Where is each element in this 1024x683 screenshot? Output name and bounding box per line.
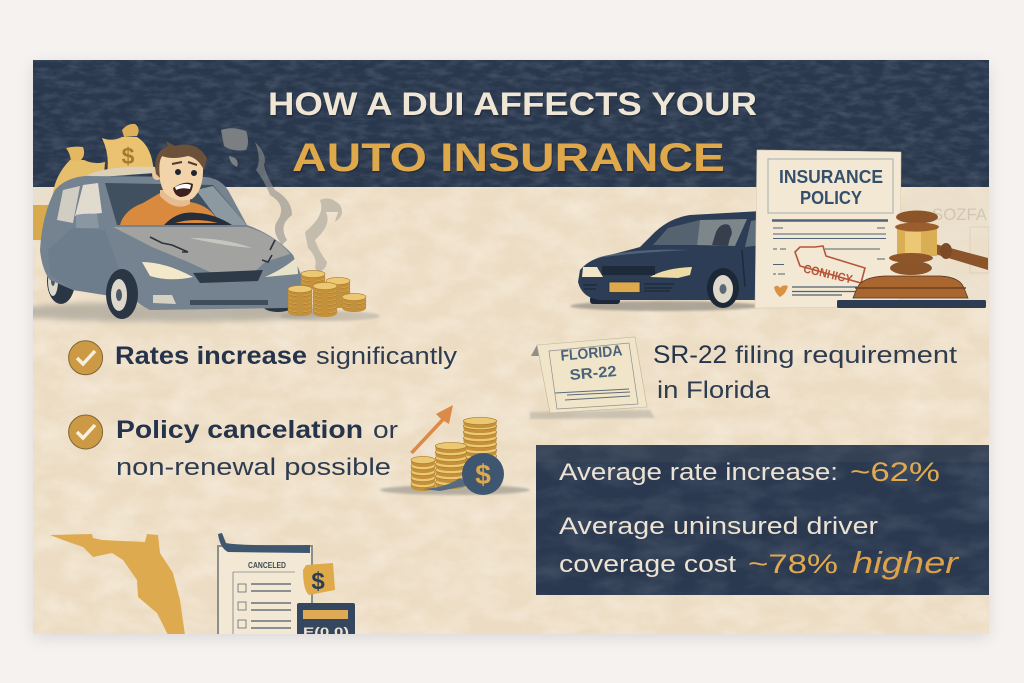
bullet: policy cancelation: Policy cancelation (116, 416, 363, 444)
door line (742, 250, 745, 287)
money bag back: $ (73, 174, 83, 193)
form lines (555, 389, 630, 400)
form inner frame (549, 343, 638, 409)
wheel (707, 268, 739, 308)
gavel handle (935, 244, 988, 270)
stat: uninsured coverage cost (559, 513, 960, 580)
clipboard sheet (218, 546, 312, 638)
illustration: yellow box left edge (33, 205, 48, 240)
stat: average rate increase: ~62% (850, 457, 940, 487)
hood cracks (150, 237, 275, 262)
ground shadow (5, 302, 335, 322)
illustration: gray car with shocked driver (5, 141, 335, 322)
rear wheel (47, 276, 74, 304)
car body (578, 211, 762, 300)
right headlight (650, 267, 692, 278)
car body (40, 176, 302, 310)
checklist (233, 572, 295, 634)
bumper vents (583, 284, 674, 291)
illustration: money bags (52, 124, 155, 197)
header band (33, 60, 989, 187)
policy heading (779, 166, 883, 208)
title: HOW A DUI AFFECTS YOUR (268, 86, 757, 122)
form sheet (537, 337, 647, 413)
red stamp (795, 246, 865, 286)
bullet: policy cancelation (116, 416, 398, 481)
red stamp: CONHICY (802, 262, 854, 286)
stat: uninsured coverage cost: higher (852, 545, 960, 580)
money bag front: $ (122, 143, 135, 169)
calculator: E(0.0) (303, 625, 349, 639)
SR-22 text (653, 341, 957, 404)
policy text lines (772, 220, 888, 295)
coin stack back (301, 270, 325, 289)
side panel shading (72, 290, 85, 292)
fog light (153, 295, 176, 304)
stat: average rate increase: Average rate increase: (559, 459, 838, 486)
bullet: rates increase: significantly (316, 343, 457, 370)
front wheel (106, 269, 138, 319)
stat: uninsured coverage cost: coverage cost (559, 551, 736, 578)
paper sheet (755, 150, 901, 308)
form shadow (530, 410, 655, 419)
windshield (653, 220, 700, 245)
windshield highlight (196, 186, 247, 225)
card shadow (33, 64, 989, 638)
driver shirt (120, 193, 217, 225)
stat: uninsured coverage cost: Average uninsured driver (559, 513, 878, 540)
ground shadow (570, 301, 760, 311)
coin stack front left (288, 285, 312, 316)
dollar tag: $ (311, 568, 325, 595)
form heading (560, 342, 625, 385)
illustration: Florida SR-22 form (530, 337, 655, 419)
policy heading: POLICY (800, 187, 863, 208)
stat: average rate increase (559, 457, 940, 487)
driver silhouette (712, 224, 732, 246)
coin stack small (342, 293, 366, 312)
stat: uninsured coverage cost: ~78% (748, 549, 838, 579)
form curl (531, 345, 541, 356)
small heart mark (774, 285, 788, 297)
coin stack tall (463, 417, 497, 469)
coin stack medium (435, 442, 467, 489)
rear window (697, 219, 747, 246)
coin stack front right (313, 282, 337, 317)
clipboard top band (218, 533, 310, 553)
paper background (33, 187, 989, 634)
policy heading: INSURANCE (779, 166, 883, 187)
illustration: left coin stacks (280, 270, 380, 321)
gavel block (853, 276, 968, 298)
front right wheel (264, 308, 288, 312)
canceled label: CANCELED (248, 560, 286, 570)
title frame (768, 159, 893, 213)
illustration: coins with rising arrow (380, 405, 530, 495)
SR-22 text: in Florida (657, 377, 771, 404)
illustration: faded document behind gavel (933, 208, 989, 274)
title: AUTO INSURANCE (293, 138, 726, 182)
money bag (422, 453, 504, 495)
grille (193, 270, 263, 283)
illustration: faded document behind gavel: SOZFA (932, 205, 988, 224)
hood shine (597, 250, 690, 258)
hood highlight (190, 238, 252, 248)
coin stack short (411, 456, 435, 491)
illustration: navy car (570, 211, 762, 311)
illustration: smoke (221, 128, 342, 272)
illustration: insurance policy document (755, 150, 901, 308)
form heading: SR-22 (569, 363, 617, 384)
driver neck (160, 190, 190, 207)
bullet: rates increase: Rates increase (115, 342, 307, 370)
SR-22 text: SR-22 (653, 341, 727, 369)
grille (602, 266, 655, 275)
driver head (152, 141, 207, 200)
left headlight (582, 267, 603, 277)
check icon: rates (69, 341, 103, 375)
illustration: canceled clipboard (218, 533, 355, 639)
rising arrow (410, 405, 453, 454)
handle knob (940, 243, 952, 259)
side window (745, 219, 762, 247)
title: AUTO INSURANCE (292, 136, 725, 180)
steering wheel (164, 212, 232, 225)
left headlight (142, 262, 193, 279)
side windows (57, 186, 80, 223)
gavel head (889, 210, 939, 275)
stat panel (536, 445, 989, 595)
license plate (609, 282, 640, 292)
check icon: policy (69, 415, 103, 449)
SR-22 text: filing requirement (735, 342, 957, 369)
money bag: $ (475, 459, 491, 490)
title (270, 92, 757, 173)
illustration: faded document behind left car (33, 191, 50, 205)
lower bumper vent (190, 300, 268, 305)
windshield (105, 183, 247, 225)
form heading: FLORIDA (560, 342, 623, 365)
shadow (380, 485, 530, 495)
base plate (837, 300, 986, 308)
bullet: policy cancelation: non-renewal possible (116, 454, 391, 481)
roof rack (87, 167, 155, 177)
front tire (590, 296, 620, 304)
hood (113, 227, 290, 276)
illustration: gavel (837, 210, 988, 308)
coin stack mid (326, 277, 350, 308)
bullet: rates increase (115, 342, 457, 370)
title: HOW A DUI AFFECTS YOUR (269, 88, 758, 124)
bullet: policy cancelation: or (373, 417, 398, 444)
right headlight (265, 257, 298, 277)
illustration: Florida map (50, 534, 185, 635)
